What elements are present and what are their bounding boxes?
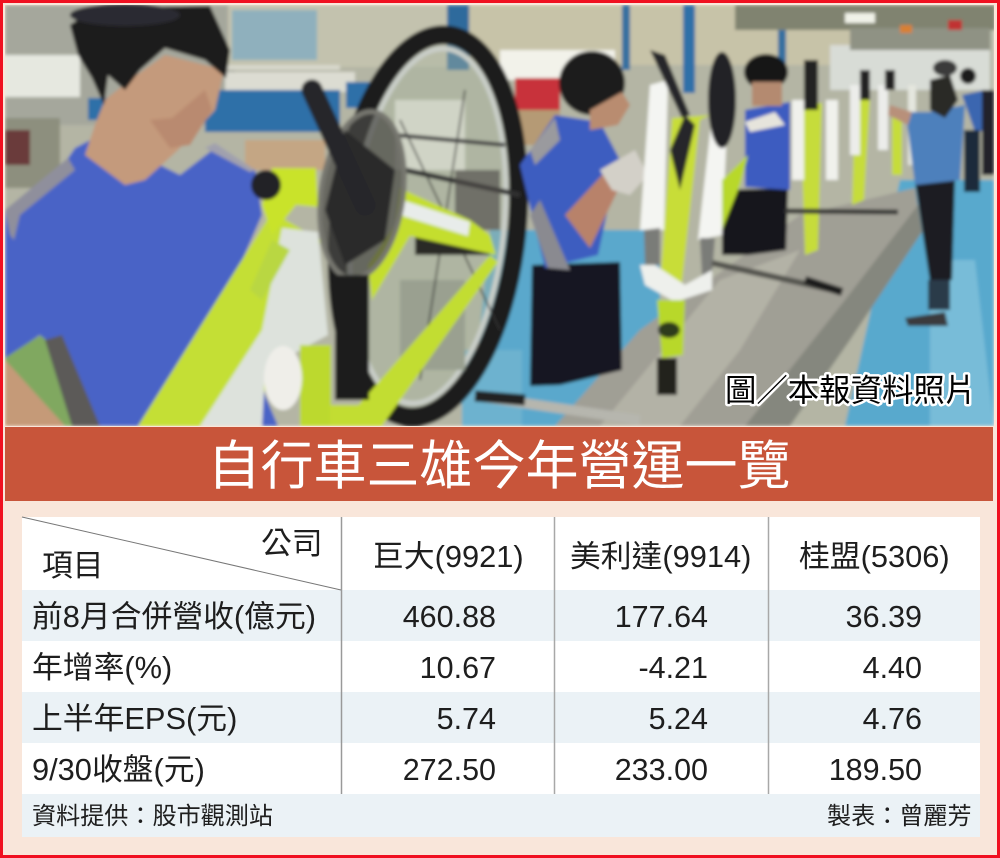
assembly conveyor [555,188,922,426]
row: closing price: 189.50 [829,753,922,787]
row: revenue: 460.88 [403,600,496,634]
row: revenue: 前8月合併營收(億元) [32,599,316,634]
title banner [5,427,993,501]
blue factory floor [462,180,994,426]
row: closing price [32,752,922,787]
source note [32,803,972,830]
handlebars [475,211,898,420]
row: growth: 4.40 [863,651,922,685]
row: revenue: 177.64 [615,600,708,634]
worker 2 [520,51,648,386]
front forks and lime frames [640,50,916,395]
photo backdrop [5,5,995,426]
row: EPS: 上半年EPS(元) [32,701,237,736]
title: 自行車三雄今年營運一覽 [208,437,790,496]
row: revenue: 36.39 [846,600,922,634]
row: EPS: 5.24 [649,702,708,736]
row: EPS: 5.74 [437,702,496,736]
row: revenue [32,599,922,634]
lime bicycle frame [138,168,498,426]
worker 3 [722,54,790,255]
header row: 巨大(9921) [373,539,524,574]
row: growth [32,650,922,685]
photo: bicycle assembly line [5,4,995,426]
header row: 美利達(9914) [570,539,751,574]
row: closing price: 233.00 [615,753,708,787]
row: growth: 年增率(%) [32,650,172,685]
photo credit caption: 圖／本報資料照片 [725,373,976,408]
row: growth: 10.67 [420,651,496,685]
header row: 桂盟(5306) [799,539,950,574]
crankset and chainring [310,90,414,400]
worker 1: head [70,4,230,185]
row: growth: -4.21 [638,651,708,685]
worker 1: foreground shirt and arm [5,135,278,426]
worker 4 [888,60,965,326]
header row: 項目 [42,548,104,583]
header row: 公司 [261,526,323,561]
source note: 製表：曾麗芳 [827,803,972,830]
row: closing price: 272.50 [403,753,496,787]
glove hand [264,346,302,410]
data table [22,517,980,837]
row: EPS: 4.76 [863,702,922,736]
green floor left [5,333,78,426]
header row [42,526,950,583]
row: closing price: 9/30收盤(元) [32,752,205,787]
far workers [960,68,994,192]
bicycle wheel [319,26,537,426]
source note: 資料提供：股市觀測站 [32,803,273,830]
row: EPS [32,701,922,736]
